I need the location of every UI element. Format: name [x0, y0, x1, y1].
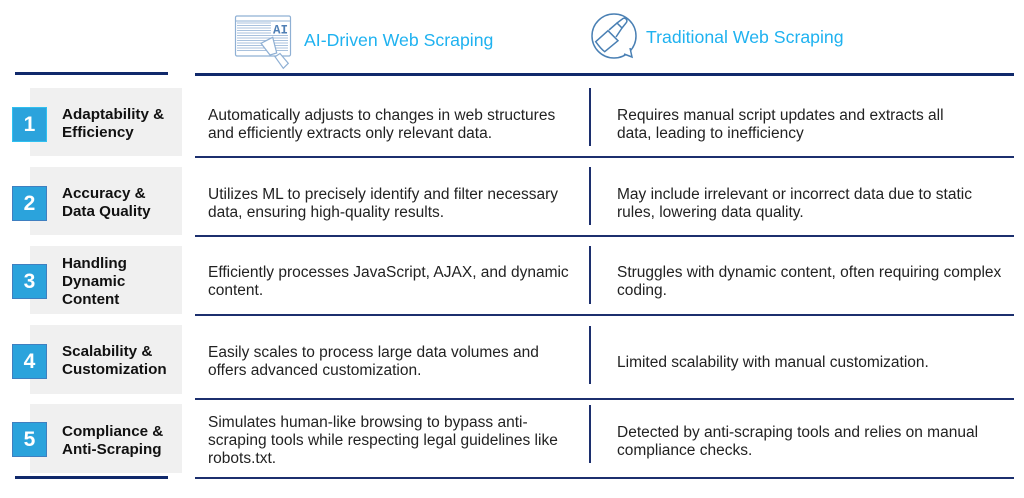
- row 5 traditional text: [617, 424, 978, 459]
- row 3 AI text: [208, 264, 569, 299]
- row 2 traditional text: [617, 186, 972, 221]
- row 1 traditional text: Requires manual script updates and extracts all: [617, 107, 944, 124]
- row 2 number: [12, 186, 47, 221]
- row 1 AI text: [208, 107, 555, 142]
- row 4 title: [62, 343, 167, 378]
- row 1 label: [30, 88, 182, 156]
- row 3 traditional text: Struggles with dynamic content, often requiring complex: [617, 264, 1001, 281]
- row 5 traditional text: compliance checks.: [617, 442, 752, 459]
- row 5 AI text: [208, 414, 558, 467]
- row 3 title: Handling: [62, 255, 127, 272]
- row 5 number: 5: [24, 428, 35, 451]
- heading: Traditional Web Scraping: Traditional Web Scraping: [646, 27, 844, 47]
- row 3 number: 3: [24, 270, 35, 293]
- heading: AI-Driven Web Scraping: AI-Driven Web Scraping: [304, 30, 493, 50]
- row 1 title: [62, 106, 164, 141]
- row 1 AI text: Automatically adjusts to changes in web structures: [208, 107, 555, 124]
- row 5 AI text: scraping tools while respecting legal guidelines like: [208, 432, 558, 449]
- icon: AI web page with scraper: [234, 15, 292, 70]
- row 3 title: Dynamic: [62, 273, 125, 290]
- row 3 AI text: Efficiently processes JavaScript, AJAX, and dynamic: [208, 264, 569, 281]
- row 5 AI text: Simulates human-like browsing to bypass anti-: [208, 414, 528, 431]
- row 2 label: [30, 167, 182, 235]
- row 2 title: Data Quality: [62, 203, 151, 220]
- row 5 label: [30, 404, 182, 473]
- row 3 number: [12, 264, 47, 299]
- row 1 traditional text: [617, 107, 944, 142]
- icon: AI web page with scraper: AI: [273, 24, 288, 38]
- row 4 AI text: offers advanced customization.: [208, 362, 421, 379]
- row 4 title: Scalability &: [62, 343, 152, 360]
- row 4 number: 4: [24, 350, 35, 373]
- row 5 title: Anti-Scraping: [62, 441, 162, 458]
- row 1 AI text: and efficiently extracts only relevant data.: [208, 125, 492, 142]
- row 2 AI text: data, ensuring high-quality results.: [208, 204, 444, 221]
- icon: scraper in speech bubble: [591, 13, 637, 59]
- row 4 title: Customization: [62, 361, 167, 378]
- row 5 AI text: robots.txt.: [208, 450, 276, 467]
- row 3 title: [62, 255, 127, 308]
- row 3 traditional text: [617, 264, 1001, 299]
- row 2 title: Accuracy &: [62, 185, 146, 202]
- row 3 title: Content: [62, 291, 119, 308]
- row 4 AI text: [208, 344, 539, 379]
- row 2 AI text: Utilizes ML to precisely identify and filter necessary: [208, 186, 558, 203]
- row 1 title: Adaptability &: [62, 106, 164, 123]
- row 4 traditional text: Limited scalability with manual customization.: [617, 354, 929, 371]
- row 1 number: 1: [24, 113, 35, 136]
- row 3 traditional text: coding.: [617, 282, 667, 299]
- row 5 traditional text: Detected by anti-scraping tools and relies on manual: [617, 424, 978, 441]
- row 2 number: 2: [24, 192, 35, 215]
- row 2 traditional text: May include irrelevant or incorrect data due to static: [617, 186, 972, 203]
- row 4 number: [12, 344, 47, 379]
- row 4 label: [30, 325, 182, 394]
- row 2 AI text: [208, 186, 558, 221]
- row 3 label: [30, 246, 182, 314]
- row 5 title: [62, 423, 163, 458]
- row 2 title: [62, 185, 151, 220]
- row 1 number: [12, 107, 47, 142]
- row 2 traditional text: rules, lowering data quality.: [617, 204, 804, 221]
- row 1 traditional text: data, leading to inefficiency: [617, 125, 804, 142]
- row 1 title: Efficiency: [62, 124, 134, 141]
- row 4 AI text: Easily scales to process large data volumes and: [208, 344, 539, 361]
- row 5 number: [12, 422, 47, 457]
- row 5 title: Compliance &: [62, 423, 163, 440]
- row 3 AI text: content.: [208, 282, 263, 299]
